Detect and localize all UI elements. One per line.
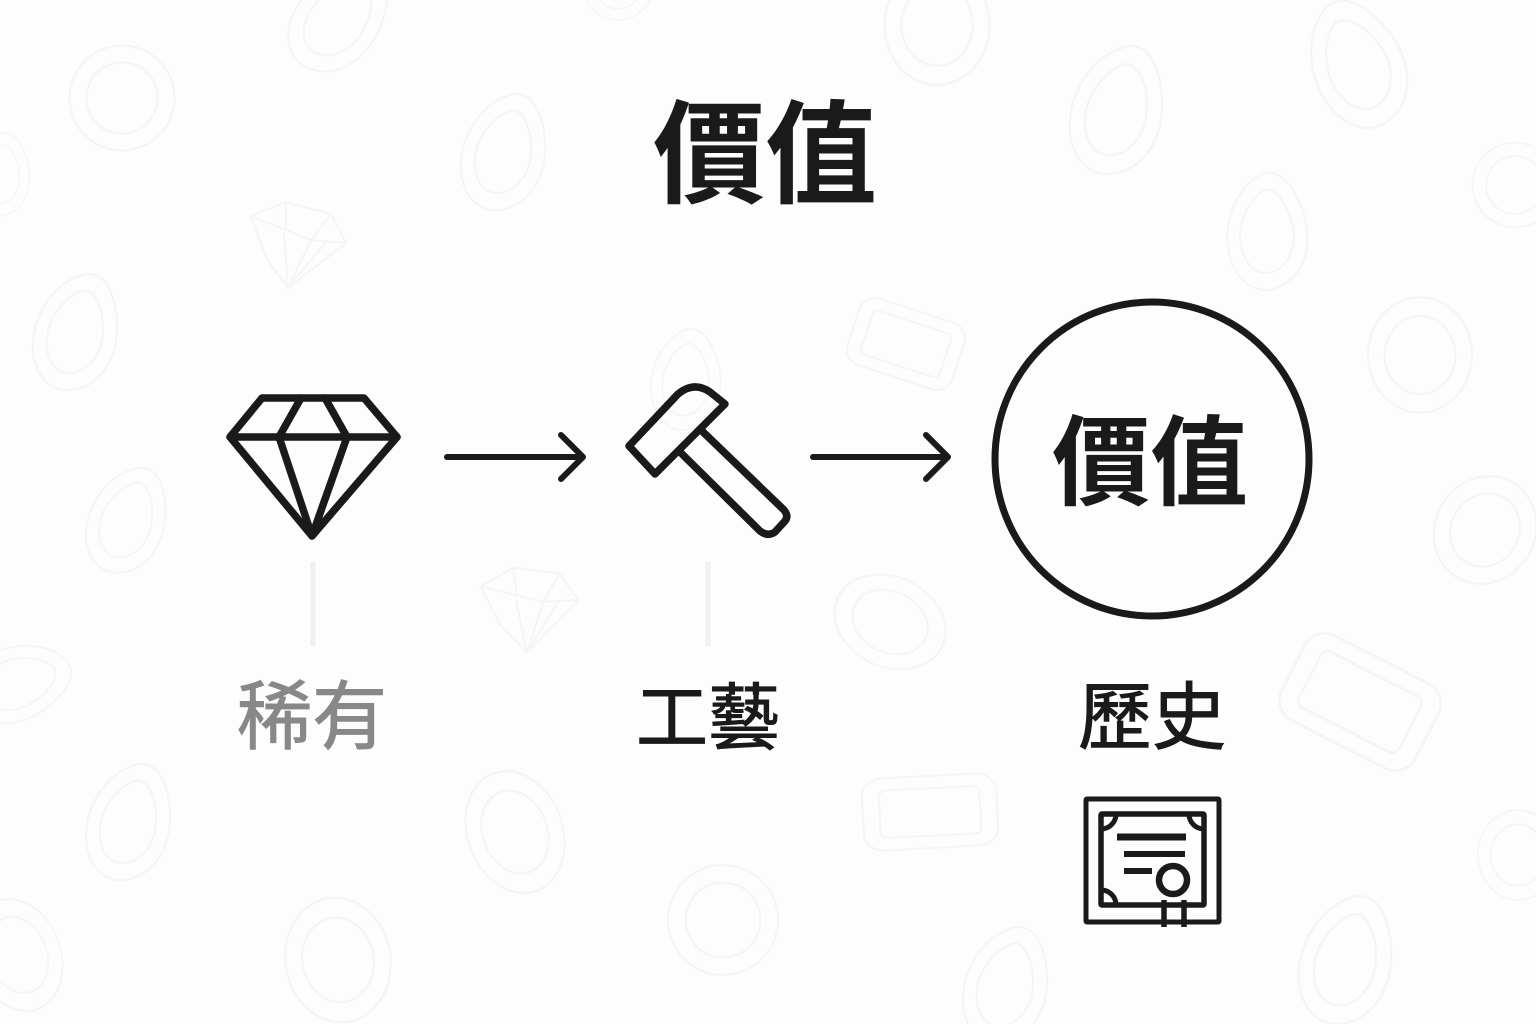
connector: rarity <box>310 562 316 646</box>
icon: certificate <box>1086 799 1219 927</box>
label: craft: 工藝 <box>636 679 780 759</box>
title: 價值 <box>653 93 877 218</box>
arrow: craft to value <box>813 435 948 479</box>
label: history: 歷史 <box>1078 676 1226 759</box>
connector: craft <box>706 562 710 646</box>
value circle <box>995 302 1309 616</box>
arrow: rarity to craft <box>447 435 583 479</box>
label: rarity: 稀有 <box>237 675 387 759</box>
value circle text: 價值 <box>1052 408 1248 518</box>
icon: hammer <box>629 387 787 534</box>
icon: diamond <box>230 398 397 536</box>
